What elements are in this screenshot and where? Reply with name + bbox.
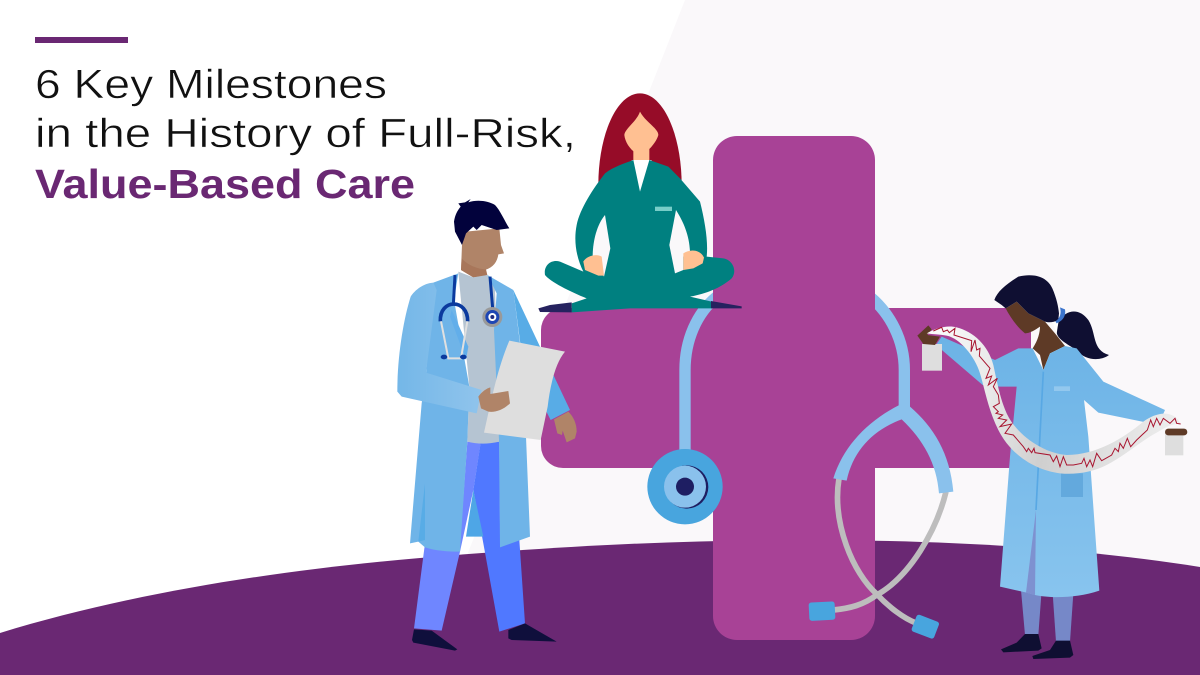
- ground: [0, 540, 1200, 675]
- paper: [484, 341, 565, 440]
- shoes: [412, 623, 557, 651]
- chest piece: [647, 449, 723, 524]
- nurse: [917, 275, 1187, 659]
- stethoscope upper tubes: [685, 297, 904, 453]
- stethoscope: [647, 405, 953, 639]
- pocket: [1061, 473, 1083, 497]
- strip holders: [922, 344, 1183, 455]
- ECG ribbon: [927, 326, 1181, 474]
- title: 6 Key Milestones: [35, 61, 387, 107]
- ponytail: [1057, 311, 1109, 359]
- pocket: [655, 207, 672, 211]
- inner coat lining: [466, 490, 483, 537]
- legs: [1021, 590, 1073, 642]
- shirt: [632, 160, 652, 193]
- gray tubes: [833, 478, 946, 623]
- title: in the History of Full-Risk,: [35, 110, 576, 156]
- right hand: [1165, 429, 1187, 435]
- shoes: [1001, 634, 1073, 659]
- coat inner strip: [1026, 510, 1036, 595]
- placket: [1036, 372, 1043, 510]
- title accent bar: [35, 37, 128, 43]
- face and hair: [454, 199, 509, 277]
- cross horizontal bar: [541, 308, 1031, 468]
- trousers: [414, 442, 525, 632]
- hair band: [1055, 307, 1065, 323]
- shoes: [538, 301, 742, 312]
- badge: [1054, 386, 1070, 391]
- ear tips: [809, 601, 940, 639]
- coat: [936, 337, 1165, 597]
- hands: [478, 387, 577, 442]
- cross vertical bar: [713, 136, 875, 640]
- doctor: [397, 199, 577, 651]
- seated patient: [538, 93, 742, 312]
- arm gaps: [593, 210, 690, 277]
- hair: [598, 93, 682, 185]
- hands: [583, 250, 704, 276]
- title: [35, 61, 576, 207]
- left sleeve: [397, 283, 482, 413]
- face and neck: [624, 112, 658, 168]
- stethoscope around neck: [440, 275, 502, 359]
- teal scrubs: [545, 160, 734, 312]
- face and neck: [1006, 302, 1065, 370]
- hair: [994, 275, 1059, 322]
- right sleeve: [513, 290, 570, 420]
- title: Value-Based Care: [35, 161, 415, 207]
- left hand: [917, 325, 940, 345]
- hair tie highlight: [1053, 321, 1059, 333]
- fork: [833, 405, 953, 493]
- shirt: [458, 272, 499, 444]
- coat: [410, 273, 530, 552]
